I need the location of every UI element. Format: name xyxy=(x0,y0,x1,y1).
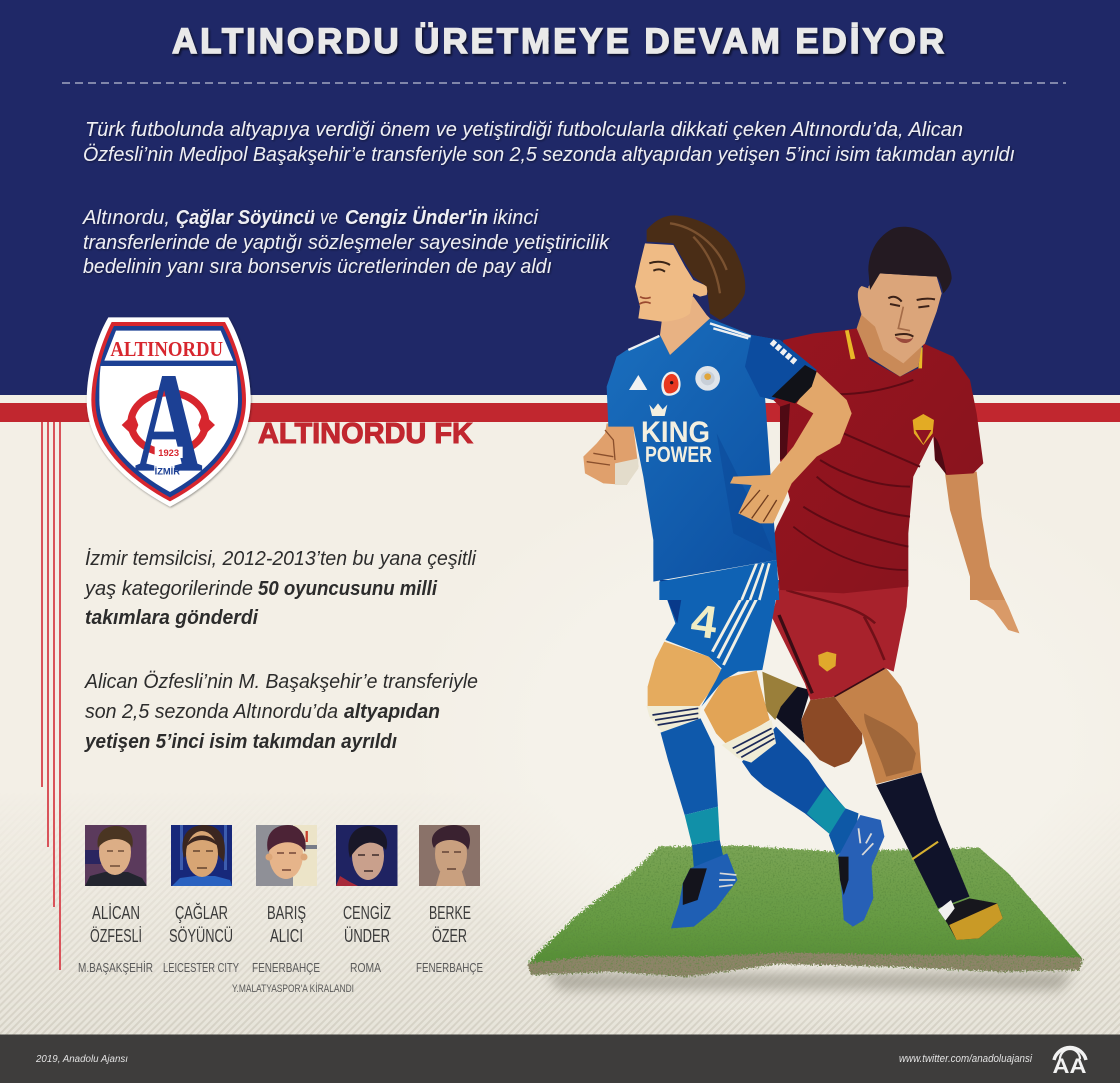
text block: transfer: Alican Özfesli’nin M. Başakşehir’e transferiyle xyxy=(84,671,478,693)
clubs xyxy=(78,960,483,995)
icon: AA logo: AA xyxy=(1052,1055,1086,1078)
footer: twitter link: www.twitter.com/anadoluajansi xyxy=(899,1053,1032,1065)
second text block: Cengiz Ünder'in xyxy=(345,206,488,229)
names: CENGİZ xyxy=(343,903,391,923)
illustration: Çağlar Söyüncü xyxy=(583,215,884,928)
clubs: ROMA xyxy=(350,960,381,975)
icon: Altınordu crest: 1923 xyxy=(158,448,179,458)
text block: transfer: altyapıdan xyxy=(344,701,440,723)
portrait: Cengiz Ünder xyxy=(336,825,398,886)
portrait: Çağlar Söyüncü xyxy=(171,825,232,886)
text block: national team players: 50 oyuncusunu milli xyxy=(258,578,437,600)
sponsor text: POWER xyxy=(645,442,712,467)
footer: copyright: 2019, Anadolu Ajansı xyxy=(35,1054,128,1065)
names: ÖZER xyxy=(432,926,467,946)
clubs: FENERBAHÇE xyxy=(416,960,483,975)
names: ALİCAN xyxy=(92,903,140,923)
background: light glow behind players xyxy=(400,450,1120,1030)
clubs: LEICESTER CITY xyxy=(163,960,239,975)
sponsor text xyxy=(641,416,712,467)
icon: AA logo xyxy=(1052,1048,1086,1078)
text block: national team players: yaş kategorilerinde xyxy=(83,578,253,600)
icon: Altınordu crest: A xyxy=(135,344,203,503)
grass shadow xyxy=(545,972,1075,990)
shirt number: 4 xyxy=(688,594,721,649)
second text block: bedelinin yanı sıra bonservis ücretlerinden de pay aldı xyxy=(83,256,552,278)
portrait: Barış Alıcı xyxy=(256,825,317,886)
grass pitch xyxy=(527,846,1082,977)
icon: Altınordu crest xyxy=(87,317,251,507)
portrait: Berke Özer xyxy=(419,825,480,886)
second text block: ve xyxy=(320,207,338,229)
second text block xyxy=(82,206,610,278)
names: ÖZFESLİ xyxy=(90,926,142,946)
illustration: Cengiz Ünder xyxy=(762,227,1019,940)
second text block: transferlerinde de yaptığı sözleşmeler sayesinde yetiştiricilik xyxy=(83,232,610,254)
panel: navy header xyxy=(0,0,1120,395)
title: ALTINORDU ÜRETMEYE DEVAM EDİYOR xyxy=(172,22,944,61)
background: diagonal stripe texture xyxy=(0,848,1120,1034)
names: ALICI xyxy=(270,926,303,946)
portrait: Alican Özfesli xyxy=(85,825,147,886)
text block: national team players: takımlara gönderdi xyxy=(85,607,258,629)
dashed divider xyxy=(62,82,1066,84)
clubs: M.BAŞAKŞEHİR xyxy=(78,960,153,975)
second text block: Altınordu, xyxy=(82,207,170,229)
second text block: Çağlar Söyüncü xyxy=(176,207,315,229)
names: BARIŞ xyxy=(267,903,306,923)
red band xyxy=(0,403,1120,422)
text block: transfer: yetişen 5’inci isim takımdan ayrıldı xyxy=(84,731,397,753)
intro text block: Özfesli’nin Medipol Başakşehir’e transferiyle son 2,5 sezonda altyapıdan yetişen 5’inci isim takımdan ayrıldı xyxy=(83,144,1015,166)
portrait: Barış Alıcı: AI xyxy=(293,829,309,846)
text block: national team players: İzmir temsilcisi, 2012-2013’ten bu yana çeşitli xyxy=(85,548,477,570)
names: ÜNDER xyxy=(344,926,390,946)
club name: ALTINORDU FK xyxy=(258,418,473,450)
second text block: ikinci xyxy=(493,207,539,229)
names: SÖYÜNCÜ xyxy=(169,926,233,946)
clubs: FENERBAHÇE xyxy=(252,960,320,975)
intro text block: Türk futbolunda altyapıya verdiği önem ve yetiştirdiği futbolcularla dikkati çeken Altınordu’da, Alican xyxy=(85,119,963,141)
icon: Altınordu crest: ALTINORDU xyxy=(110,339,223,361)
text block: national team players xyxy=(83,548,477,629)
text block: transfer: son 2,5 sezonda Altınordu’da xyxy=(85,701,338,723)
text block: transfer xyxy=(84,671,478,753)
names: BERKE xyxy=(429,903,471,923)
decorative red lines xyxy=(41,422,61,970)
footer bar xyxy=(0,1034,1120,1083)
sponsor text: KING xyxy=(641,416,710,449)
intro text block xyxy=(83,119,1015,166)
names: ÇAĞLAR xyxy=(175,902,228,923)
names xyxy=(90,902,471,946)
clubs: Y.MALATYASPOR'A KİRALANDI xyxy=(232,982,354,995)
icon: Altınordu crest: İZMİR xyxy=(155,467,180,477)
